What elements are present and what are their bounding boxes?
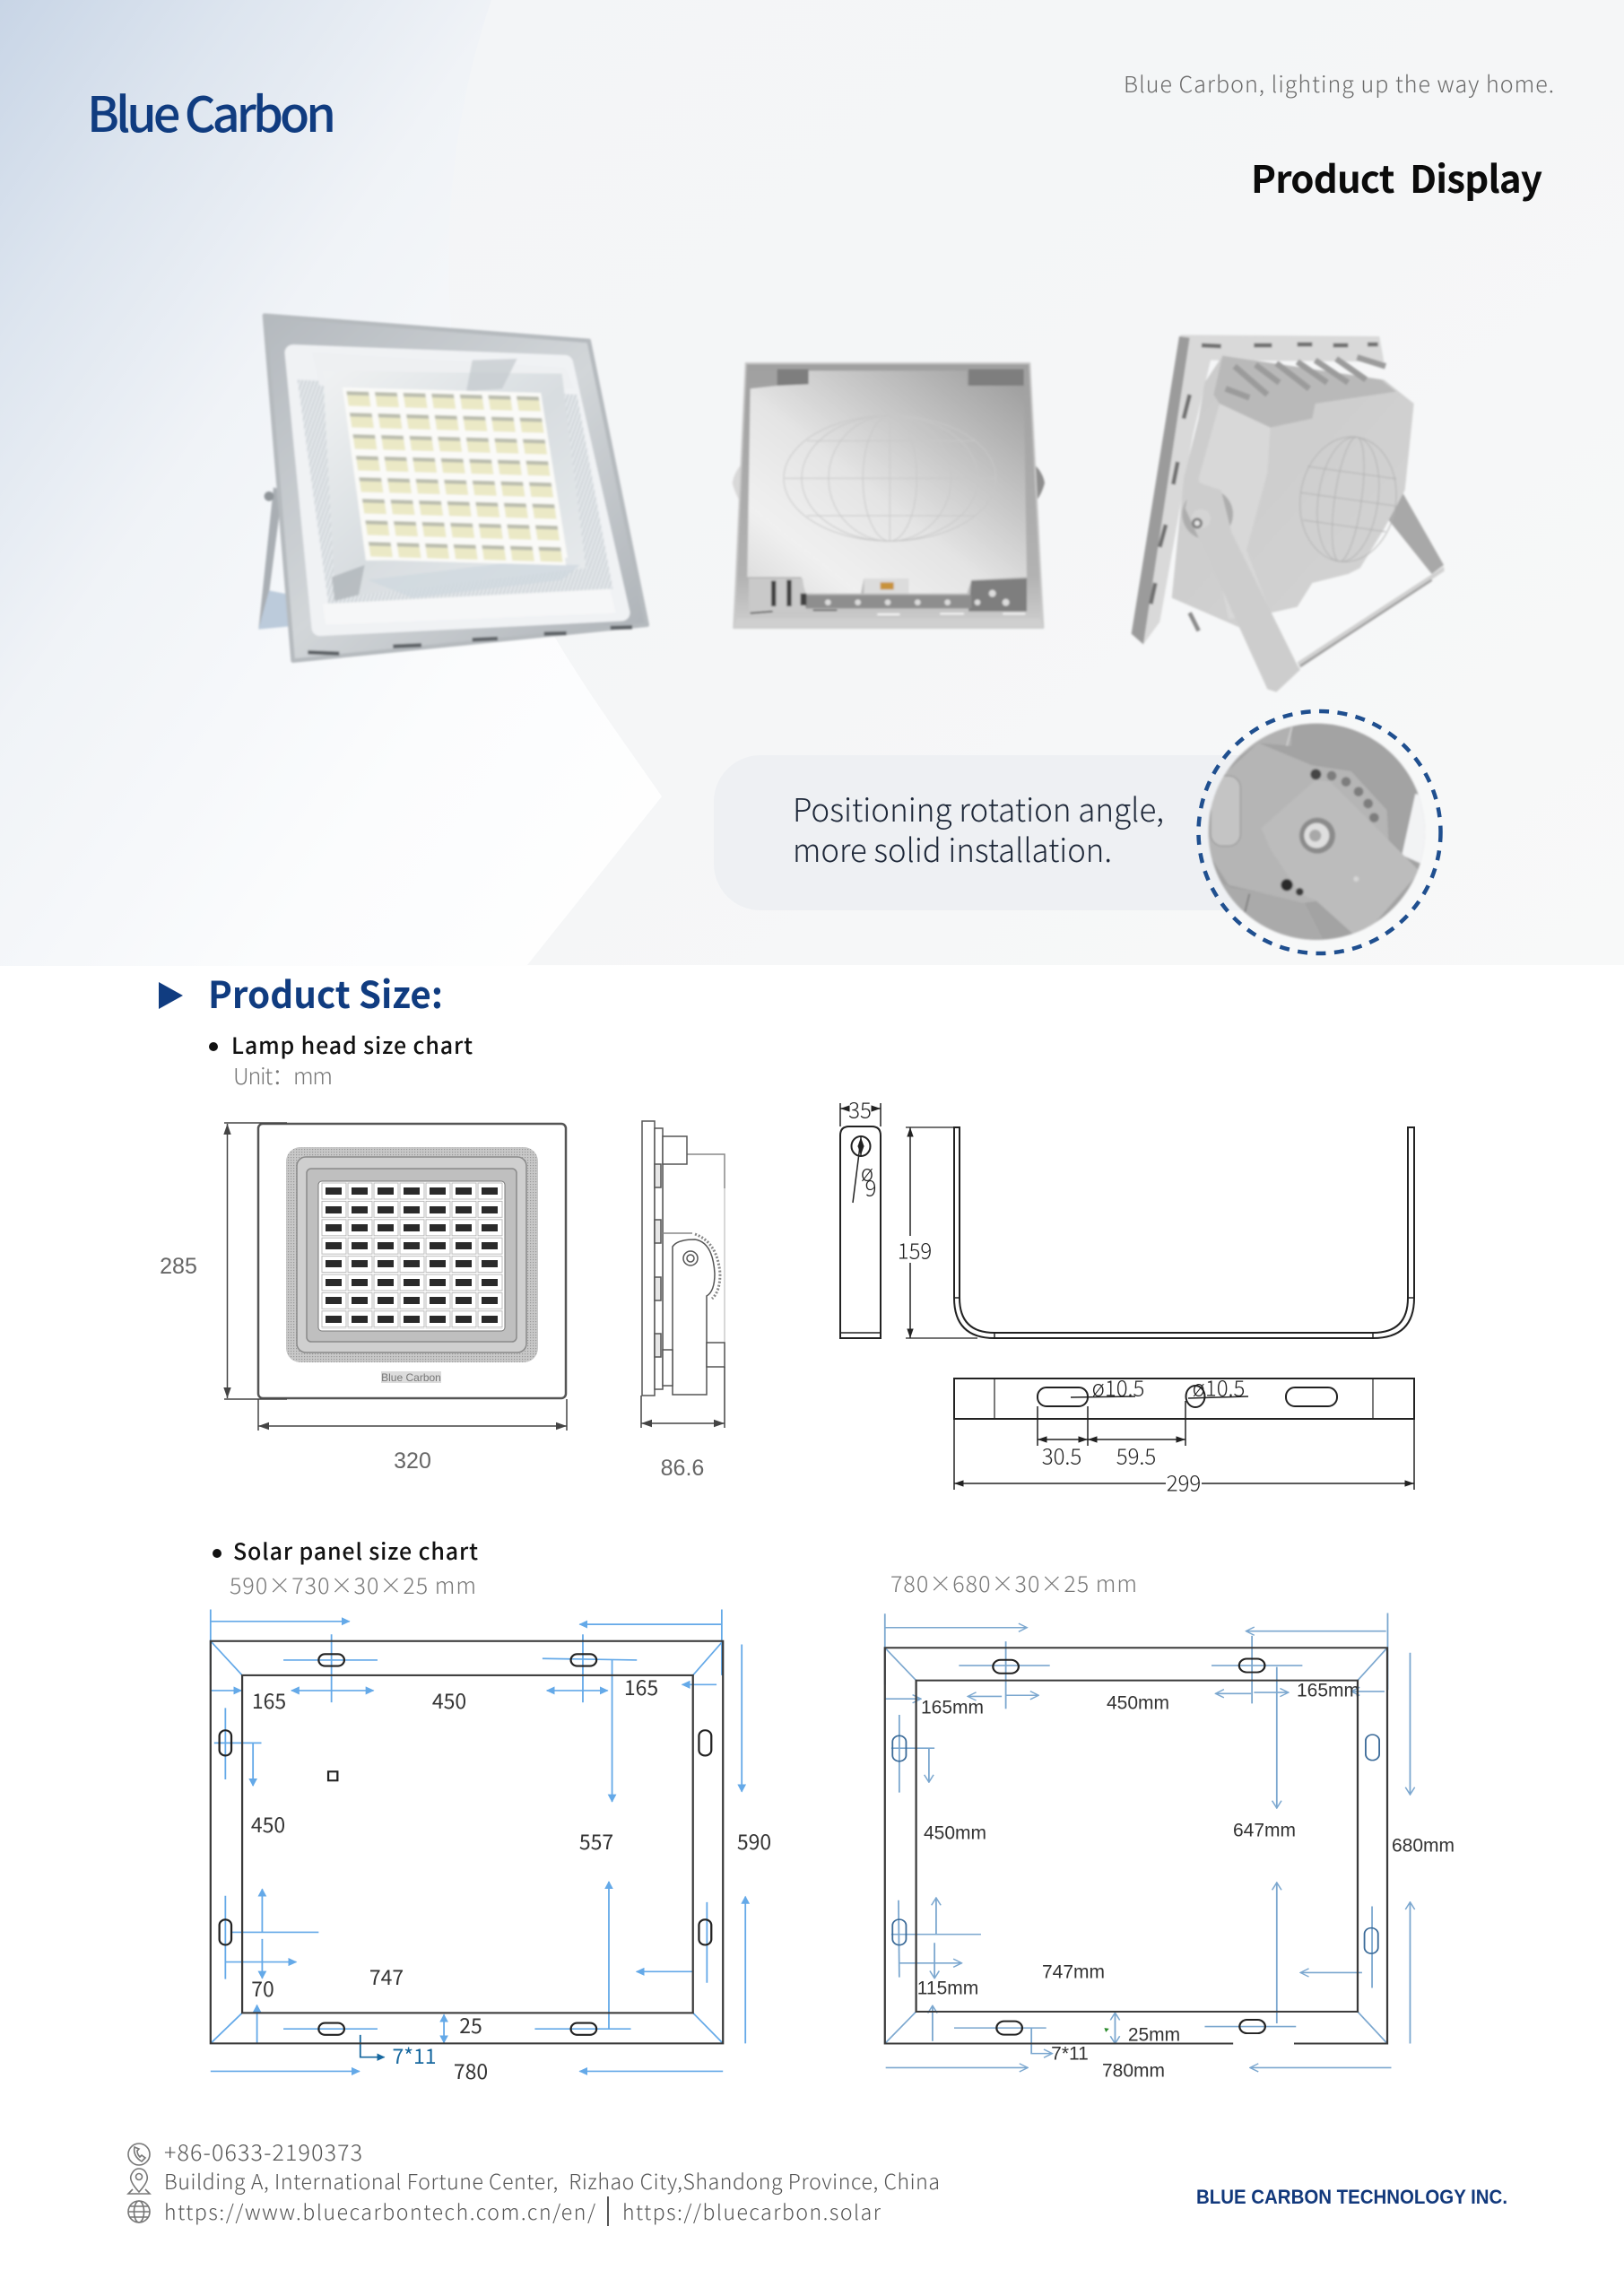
icon: globe bbox=[128, 2201, 150, 2222]
drawing: U bracket profile bbox=[898, 1127, 1414, 1338]
footer: company name: BLUE CARBON TECHNOLOGY INC. bbox=[1196, 2186, 1507, 2208]
solar panel 680 labels: 7*11 bbox=[1051, 2043, 1089, 2065]
subheading: lamp head size chart: Lamp head size chart bbox=[231, 1029, 473, 1061]
solar panel 680 labels: 450mm bbox=[924, 1822, 986, 1844]
drawing: bracket plan view bbox=[954, 1370, 1414, 1498]
dashed ring bbox=[1198, 711, 1440, 953]
detail photo: rotation bolt bbox=[1207, 722, 1421, 942]
solar panel 680 labels: 680mm bbox=[1392, 1835, 1455, 1857]
solar panel 590 labels bbox=[251, 1671, 771, 2085]
solar panel 590 labels: 450 bbox=[251, 1808, 285, 1839]
label 159: 159 bbox=[898, 1234, 932, 1265]
solar panel 680 labels: 165mm bbox=[921, 1697, 984, 1718]
bracket plan labels: ø10.5 bbox=[1092, 1370, 1144, 1403]
solar panel 680 labels: 780mm bbox=[1102, 2061, 1165, 2081]
drawing: solar panel 590 bbox=[211, 1610, 771, 2085]
icon: phone bbox=[128, 2144, 150, 2165]
callout text bbox=[793, 785, 1164, 872]
label phi 9: 9 bbox=[865, 1171, 876, 1202]
bracket plan labels bbox=[1042, 1370, 1245, 1498]
drawing: solar panel 680 bbox=[885, 1613, 1455, 2081]
front label plate: Blue Carbon bbox=[381, 1371, 441, 1384]
bracket plan labels: 299 bbox=[1167, 1465, 1201, 1498]
depth dimension bbox=[641, 1367, 725, 1428]
heading: Product Display: Product Display bbox=[1251, 150, 1542, 204]
bracket plan labels: 59.5 bbox=[1116, 1439, 1156, 1471]
icon: location pin bbox=[128, 2169, 150, 2194]
LED grid bbox=[326, 1187, 498, 1323]
dimension labels: 285 bbox=[160, 1254, 197, 1279]
footer: website links: https://bluecarbon.solar bbox=[622, 2196, 881, 2226]
product photo: floodlight front view bbox=[258, 316, 647, 661]
globe emblem bbox=[784, 415, 996, 541]
solar panel 590 labels: 557 bbox=[579, 1825, 613, 1856]
logo: Blue Carbon: Blue Carbon bbox=[87, 75, 336, 146]
solar panel 680 labels: 115mm bbox=[917, 1979, 978, 1998]
solar panel 590 labels: 165 bbox=[252, 1684, 286, 1715]
product photo: floodlight back view bbox=[733, 363, 1045, 628]
callout: rotation angle bbox=[795, 709, 1443, 956]
section heading: Product Size: Product Size: bbox=[208, 965, 443, 1019]
footer: website links bbox=[164, 2196, 881, 2226]
solar panel 680 labels: 647mm bbox=[1233, 1821, 1296, 1840]
solar panel 680 labels bbox=[917, 1681, 1455, 2081]
bracket plan labels: ø10.5 bbox=[1193, 1370, 1245, 1403]
solar panel 590 labels: 450 bbox=[432, 1684, 466, 1715]
solar panel 590 labels: 780 bbox=[454, 2055, 488, 2085]
drawing: lamp side view bbox=[641, 1121, 725, 1481]
bracket plan labels: 30.5 bbox=[1042, 1439, 1081, 1471]
callout text: Positioning rotation angle, bbox=[793, 785, 1164, 831]
depth label: 86.6 bbox=[661, 1456, 704, 1481]
dimension labels: 320 bbox=[394, 1448, 431, 1474]
footer: phone number: +86-0633-2190373 bbox=[164, 2135, 362, 2168]
solar panel 590 labels: 590 bbox=[737, 1825, 771, 1856]
unit note: Unit：mm bbox=[233, 1059, 333, 1091]
solar panel 590 labels: 747 bbox=[369, 1961, 404, 1991]
solar panel 680 labels: 450mm bbox=[1107, 1693, 1169, 1713]
footer: address: Building A, International Fortune Center, Rizhao City,Shandong Province, China bbox=[164, 2165, 940, 2196]
footer: website links: https://www.bluecarbontech.com.cn/en/ bbox=[164, 2196, 595, 2226]
solar panel 590 labels: 165 bbox=[624, 1671, 658, 1701]
subheading: solar panel size chart: Solar panel size chart bbox=[233, 1535, 478, 1567]
solar panel 680 labels: 165mm bbox=[1297, 1681, 1359, 1700]
tagline: Blue Carbon, lighting up the way home. bbox=[1124, 67, 1554, 100]
drawing: lamp front view bbox=[160, 1123, 567, 1474]
solar panel 590 labels: 70 bbox=[251, 1972, 274, 2003]
label phi 9: ø bbox=[861, 1155, 873, 1187]
hero background bbox=[0, 0, 1624, 966]
dimension labels bbox=[160, 1254, 431, 1474]
height dimension bbox=[224, 1123, 567, 1431]
solar panel 680 labels: 25mm bbox=[1128, 2025, 1180, 2045]
solar panel 590 labels: 7*11 bbox=[392, 2039, 437, 2070]
drawing: mounting bracket side view bbox=[840, 1092, 881, 1338]
product photo: floodlight rear angled view bbox=[1132, 335, 1445, 692]
spec: 780x680 panel: 780×680×30×25 mm bbox=[890, 1567, 1137, 1599]
solar panel 680 labels: 747mm bbox=[1042, 1962, 1105, 1982]
label phi 9 bbox=[861, 1155, 876, 1202]
callout text: more solid installation. bbox=[793, 825, 1112, 872]
label 35: 35 bbox=[848, 1092, 872, 1125]
solar panel 590 labels: 25 bbox=[459, 2009, 482, 2039]
spec: 590x730 panel: 590×730×30×25 mm bbox=[230, 1569, 476, 1601]
